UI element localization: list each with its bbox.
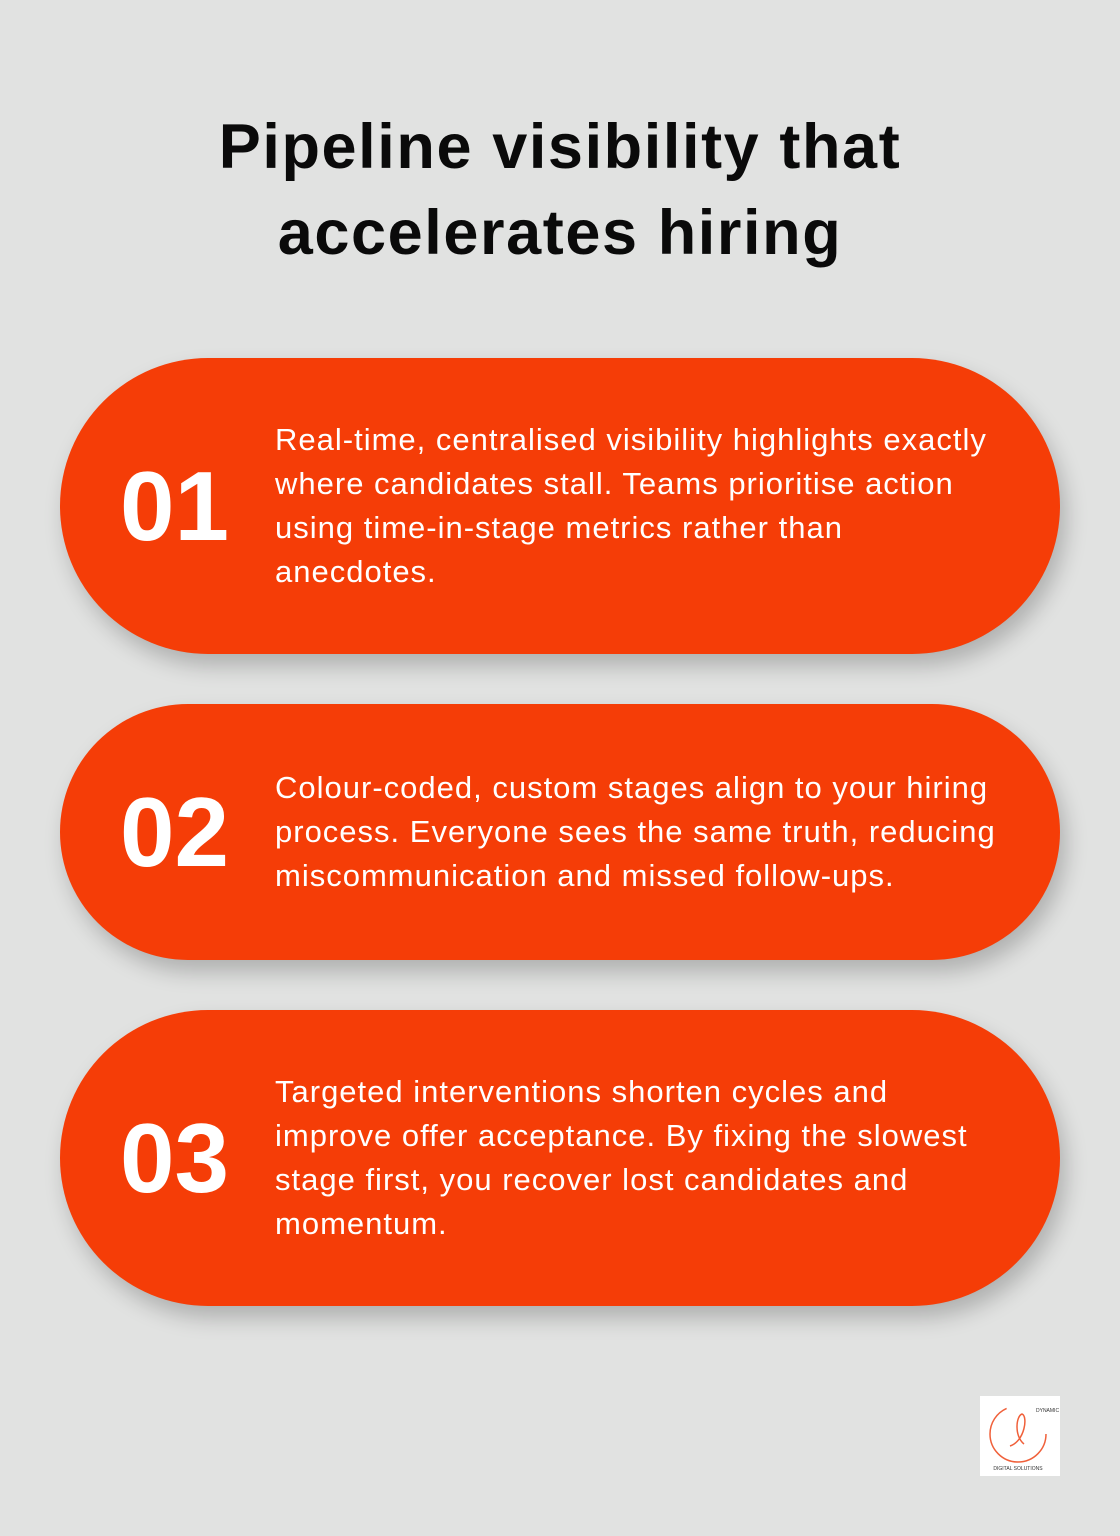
icon: logo: DIGITAL SOLUTIONS: [993, 1466, 1043, 1472]
number 02: 02: [120, 777, 229, 887]
text 02: [275, 770, 996, 893]
number 01: 01: [120, 451, 229, 561]
text 01: where candidates stall. Teams prioritise action: [275, 466, 954, 501]
text 02: process. Everyone sees the same truth, reducing: [275, 814, 996, 849]
text 03: stage first, you recover lost candidates and: [275, 1162, 908, 1197]
number 03: 03: [120, 1103, 229, 1213]
text 03: improve offer acceptance. By fixing the slowest: [275, 1118, 968, 1153]
icon: logo: [980, 1396, 1060, 1476]
text 03: momentum.: [275, 1206, 448, 1241]
text 02: Colour-coded, custom stages align to your hiring: [275, 770, 988, 805]
title: [219, 112, 901, 268]
title: accelerates hiring: [278, 198, 842, 268]
text 01: Real-time, centralised visibility highlights exactly: [275, 422, 987, 457]
panel: card 03: [60, 1010, 1060, 1306]
text 02: miscommunication and missed follow-ups.: [275, 858, 895, 893]
title: Pipeline visibility that: [219, 112, 901, 182]
text 01: [275, 422, 987, 589]
icon: logo: DYNAMIC: [1036, 1408, 1059, 1414]
panel: card 02: [60, 704, 1060, 960]
text 01: using time-in-stage metrics rather than: [275, 510, 843, 545]
text 03: [275, 1074, 968, 1241]
text 01: anecdotes.: [275, 554, 437, 589]
text 03: Targeted interventions shorten cycles and: [275, 1074, 888, 1109]
panel: card 01: [60, 358, 1060, 654]
